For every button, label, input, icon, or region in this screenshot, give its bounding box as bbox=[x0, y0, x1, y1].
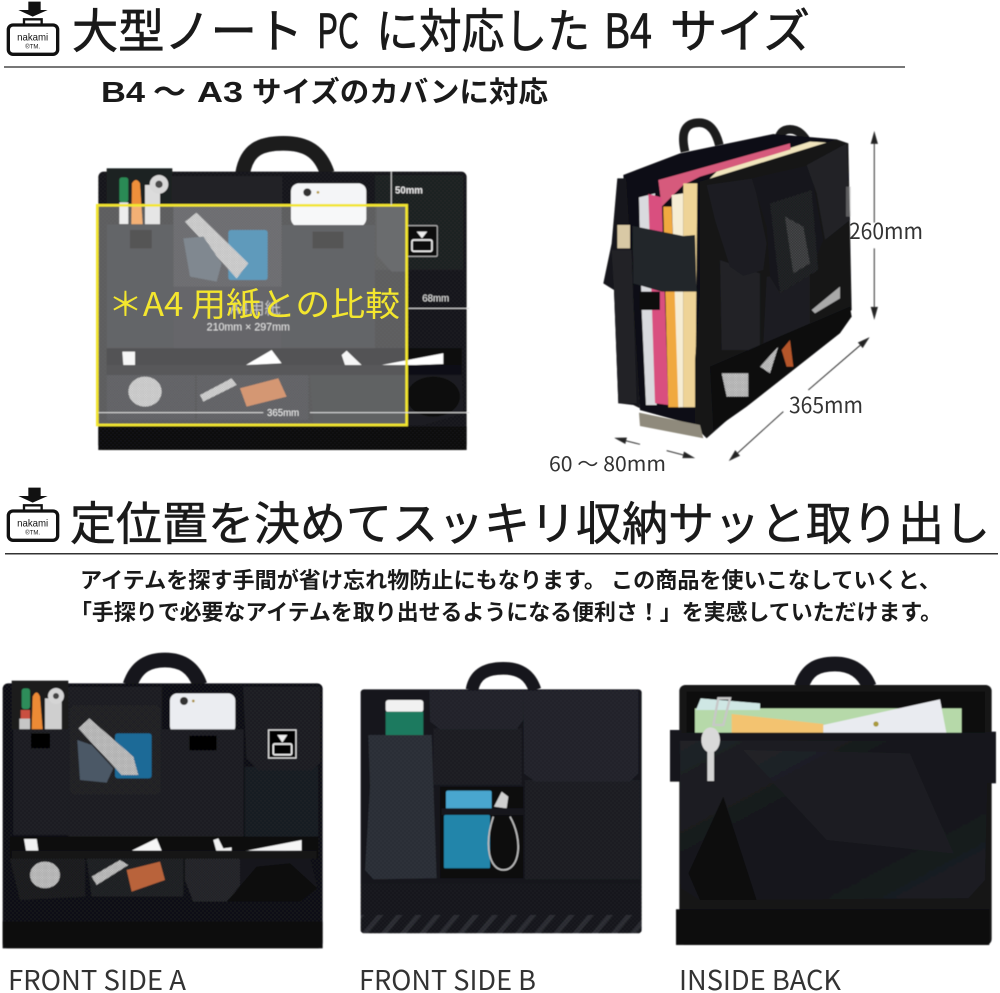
label: height 260mm: 260mm bbox=[849, 214, 923, 246]
dimension 68mm bbox=[408, 294, 469, 308]
text block: description bbox=[70, 563, 942, 627]
A4 paper overlay pockets bbox=[107, 205, 463, 425]
documents bbox=[695, 698, 962, 734]
photo: organizer filled with documents, angled view bbox=[603, 123, 877, 460]
brand label bbox=[407, 226, 437, 256]
subheading: bag size range bbox=[101, 69, 548, 111]
pens bbox=[119, 175, 168, 224]
lower pockets bbox=[10, 851, 317, 902]
subheading: bag size range: ～ bbox=[153, 69, 186, 111]
dimension 365mm: 365mm bbox=[267, 408, 299, 419]
photo: front side A bbox=[3, 660, 323, 948]
strap bbox=[633, 226, 697, 292]
photo: inside back bbox=[670, 664, 996, 945]
dimension arrow 60-80mm bbox=[616, 438, 693, 458]
title: section two heading: 定位置を決めてスッキリ収納サッと取り出し bbox=[70, 488, 990, 554]
yellow A4 frame bbox=[97, 205, 407, 425]
documents bbox=[639, 142, 828, 407]
icon: nakami logo lower bbox=[8, 488, 58, 540]
key bbox=[701, 698, 730, 781]
right flap pocket bbox=[523, 691, 640, 879]
callout: A4 paper comparison: ＊A4 用紙との比較 bbox=[108, 278, 400, 326]
mesh pocket bbox=[440, 787, 523, 878]
photo: front of organizer with A4 comparison bbox=[97, 143, 469, 450]
dimension 50mm bbox=[391, 172, 423, 205]
label: width 365mm: 365mm bbox=[789, 388, 863, 420]
icon: nakami logo lower: nakami bbox=[17, 518, 48, 529]
phone bbox=[291, 183, 366, 227]
umbrella item bbox=[386, 700, 423, 737]
mesh pouch bbox=[70, 705, 161, 794]
pens bbox=[19, 688, 64, 729]
handle bbox=[801, 664, 869, 687]
title: section one heading bbox=[72, 0, 810, 62]
dimension arrow 365mm bbox=[730, 338, 868, 460]
icon: nakami logo top: ®TM. bbox=[25, 44, 40, 51]
subheading: bag size range: A3 bbox=[197, 77, 243, 109]
handle bbox=[130, 660, 200, 685]
subheading: bag size range: サイズのカバンに対応 bbox=[252, 69, 548, 111]
handle bbox=[472, 668, 535, 690]
velcro strip bbox=[676, 909, 989, 945]
dimension 50mm: 50mm bbox=[395, 185, 423, 196]
dimension 68mm: 68mm bbox=[422, 294, 449, 305]
handles bbox=[683, 123, 811, 160]
front panel bbox=[695, 139, 852, 438]
center flap bbox=[429, 691, 523, 785]
A4 size text: A4用紙 bbox=[230, 295, 281, 319]
icon: nakami logo top bbox=[8, 2, 58, 54]
subheading: bag size range: B4 bbox=[101, 77, 145, 109]
photo: front side B bbox=[361, 668, 642, 933]
icon: nakami logo top: nakami bbox=[17, 32, 48, 43]
text block: description: アイテムを探す手間が省け忘れ物防止にもなります。 この商品を使いこなしていくと、 bbox=[80, 563, 941, 595]
flap with label bbox=[243, 687, 320, 770]
icon: nakami logo lower: ®TM. bbox=[25, 530, 40, 537]
A4 size text bbox=[207, 295, 290, 334]
dimension arrow 260mm bbox=[871, 133, 877, 318]
tall left pocket bbox=[365, 735, 437, 879]
label: depth 60 to 80mm: 60 ～ 80mm bbox=[549, 448, 666, 477]
handle bbox=[243, 143, 327, 173]
mesh pocket bbox=[680, 734, 988, 900]
lower pockets bbox=[710, 307, 852, 430]
phone bbox=[170, 693, 235, 733]
bottom board bbox=[639, 413, 703, 438]
text block: description: 「手探りで必要なアイテムを取り出せるようになる便利さ！」を実感していただけます。 bbox=[70, 595, 942, 627]
A4 size text: 210mm × 297mm bbox=[207, 322, 290, 334]
